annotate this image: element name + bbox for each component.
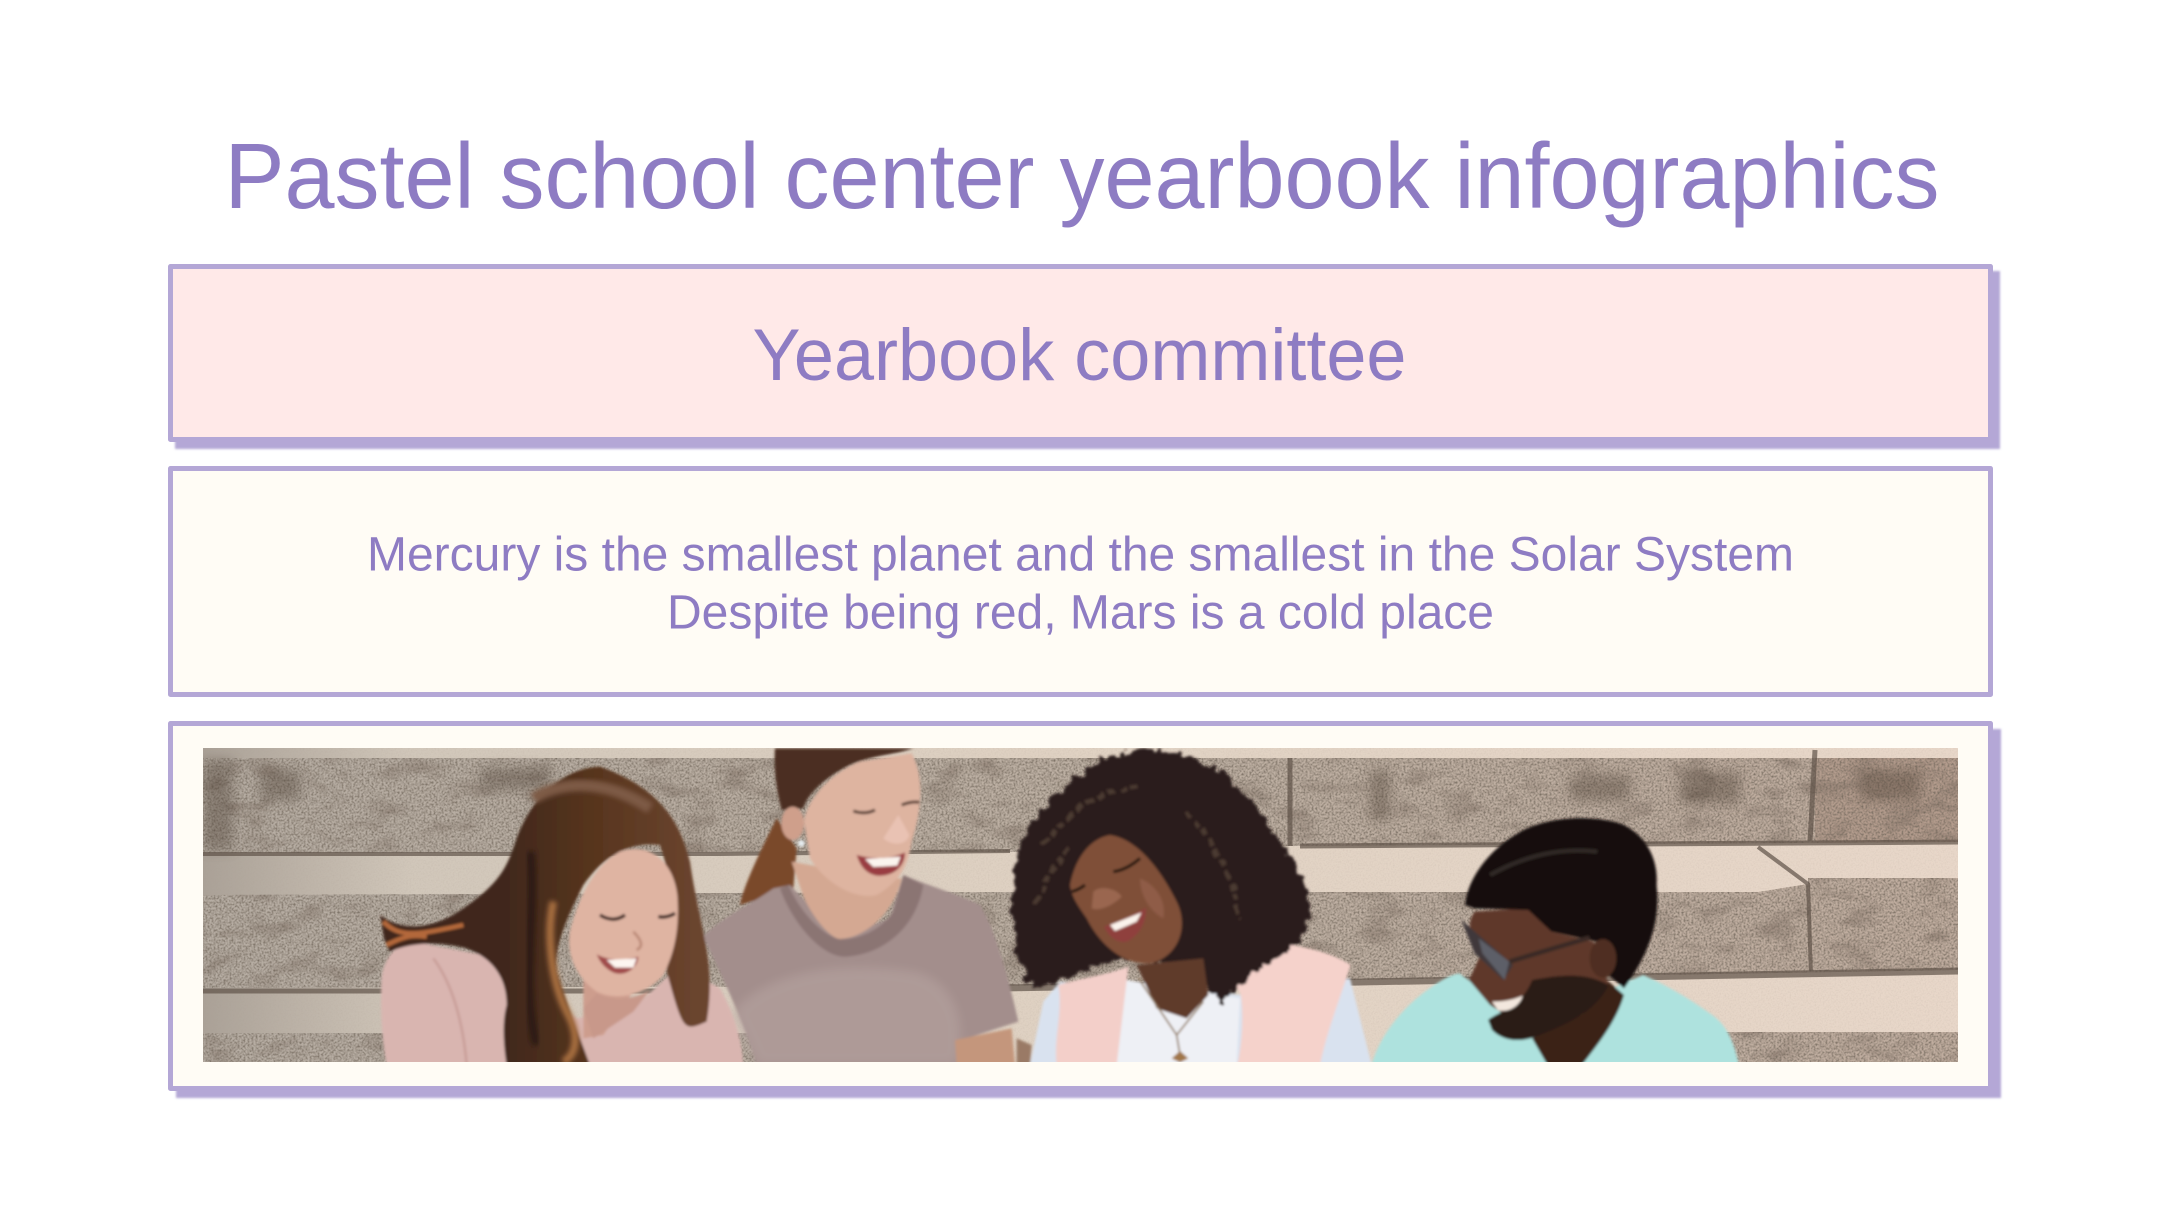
panel: yearbook committee banner — [170, 266, 2000, 449]
panel: photo frame — [170, 724, 2001, 1098]
person: man with sunglasses — [1371, 818, 1739, 1065]
person: woman with curly hair — [1012, 750, 1372, 1065]
person: girl in pink shirt — [380, 767, 743, 1065]
stone steps background — [203, 748, 1958, 1062]
dark weather stains on stone — [203, 760, 1920, 850]
title: Pastel school center yearbook infographics — [224, 124, 1940, 228]
description line one: Mercury is the smallest planet and the smallest in the Solar System — [367, 528, 1794, 582]
stone joints and shadow lines — [203, 750, 1958, 991]
photo: four students on stone steps — [203, 748, 1958, 1065]
banner heading: Yearbook committee — [752, 315, 1406, 396]
person: girl in mauve shirt — [703, 748, 1018, 1065]
description line two: Despite being red, Mars is a cold place — [667, 586, 1494, 640]
panel: description text — [170, 468, 1990, 694]
